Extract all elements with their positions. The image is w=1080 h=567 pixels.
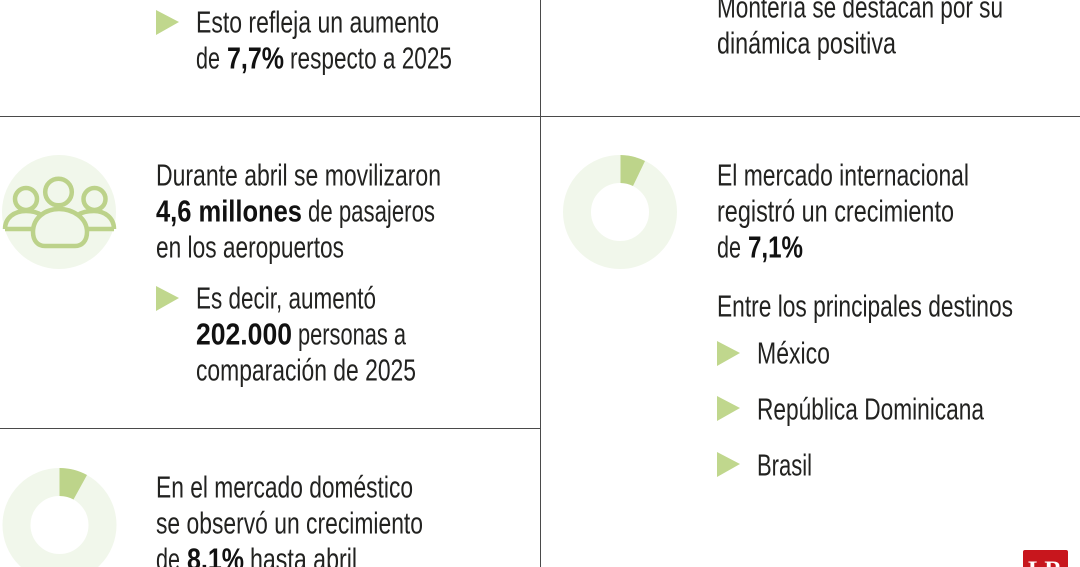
text: increase in people: comparación de 2025	[196, 352, 416, 388]
text: increase in people: personas a	[298, 316, 407, 352]
list item: Brasil: Brasil	[757, 448, 812, 482]
text: Montería dynamics	[717, 0, 1003, 60]
text: increase versus 2025: de	[196, 40, 220, 76]
text: increase versus 2025: 7,7%	[227, 40, 284, 76]
text: international market growth: 7,1%	[748, 230, 803, 264]
text: increase in people: 202.000	[196, 316, 292, 352]
list item: República Dominicana	[717, 392, 985, 426]
text: passengers moved in April	[156, 158, 441, 264]
icon: group of people	[2, 155, 116, 269]
text: increase versus 2025: Esto refleja un aumento	[196, 4, 439, 40]
text: increase in people: Es decir, aumentó	[196, 280, 376, 316]
text: international market growth	[717, 158, 969, 264]
text: increase versus 2025: respecto a 2025	[290, 40, 452, 76]
text: passengers moved in April: en los aeropuertos	[156, 230, 344, 264]
text: domestic market growth: En el mercado doméstico	[156, 470, 413, 504]
chart: international market donut 7.1%	[577, 155, 663, 255]
arrow: passengers bullet	[156, 286, 179, 311]
text: domestic market growth	[156, 470, 423, 567]
text: international market growth: de	[717, 230, 741, 264]
text: increase in people	[196, 280, 416, 388]
list item: México: México	[757, 336, 830, 370]
logo: LR	[1023, 550, 1068, 567]
text: passengers moved in April: de pasajeros	[308, 194, 435, 228]
text: increase versus 2025	[196, 4, 452, 76]
arrow: top left bullet	[156, 10, 179, 35]
text: international market growth: registró un crecimiento	[717, 194, 954, 228]
list item: República Dominicana: República Dominicana	[757, 392, 985, 426]
text: Montería dynamics: dinámica positiva	[717, 26, 897, 60]
chart: domestic market donut 8.1%	[16, 468, 102, 567]
text: domestic market growth: se observó un crecimiento	[156, 506, 423, 540]
text: passengers moved in April: 4,6 millones	[156, 194, 302, 228]
list item: México	[717, 336, 830, 370]
text: passengers moved in April: Durante abril se movilizaron	[156, 158, 441, 192]
list item: Brasil	[717, 448, 812, 482]
text: international market growth: El mercado internacional	[717, 158, 969, 192]
